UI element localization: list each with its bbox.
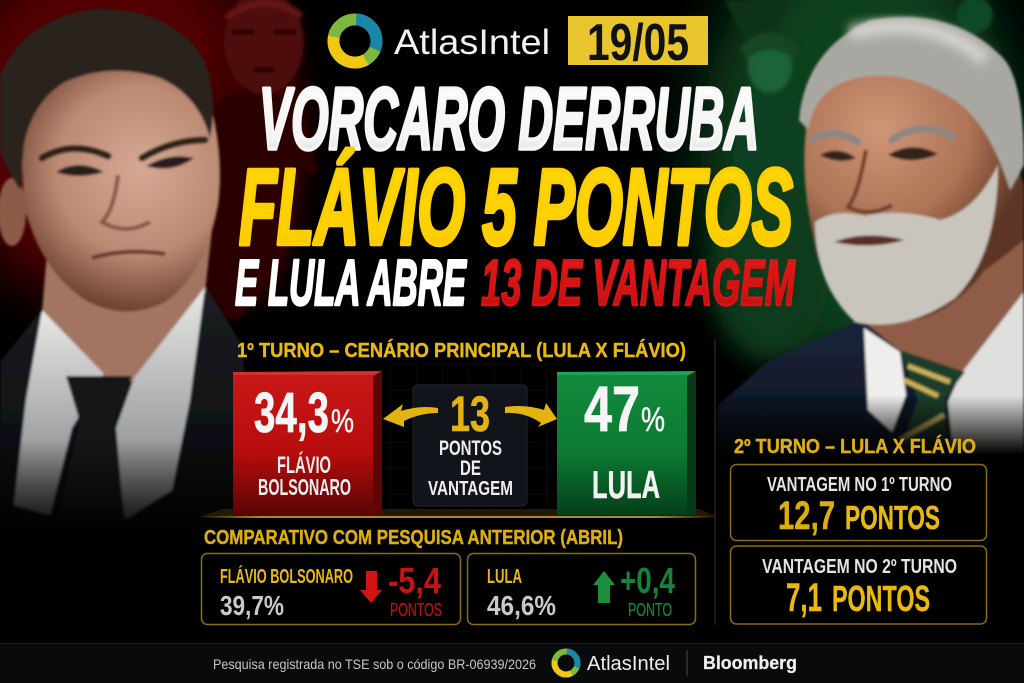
shirt right: [948, 292, 1024, 470]
eyebrows: [812, 129, 952, 142]
panel: second round advantage: [730, 546, 986, 624]
second round section heading: 2º TURNO – LULA X FLÁVIO: [734, 435, 976, 458]
shirt collar left: [864, 328, 906, 432]
panel: 13 points advantage: [413, 385, 527, 506]
suit jacket: [0, 285, 262, 560]
value: 34,3: [254, 381, 329, 445]
hair: [0, 9, 213, 190]
shelf line: [200, 509, 716, 518]
footer note: Pesquisa registrada no TSE sob o código BR-06939/2026: [213, 656, 536, 672]
neck: [42, 230, 212, 382]
suit jacket: [710, 300, 1024, 520]
header: AtlasIntel wordmark: AtlasIntel: [394, 23, 550, 62]
arrow: pointing to Flávio: [383, 404, 438, 427]
header: AtlasIntel logo: [326, 12, 384, 70]
panel: Flávio comparison: [202, 554, 460, 624]
label: VANTAGEM NO 1º TURNO: [767, 474, 952, 496]
name: LULA: [487, 566, 522, 588]
eyebrows: [42, 140, 205, 158]
unit: PONTO: [628, 600, 672, 620]
arrow: pointing to Lula: [505, 403, 557, 427]
name line 2: BOLSONARO: [258, 474, 351, 500]
mouth: [92, 252, 165, 258]
ghost portrait: red background figure: [205, 0, 318, 320]
unit: PONTOS: [390, 600, 442, 620]
label line 1: PONTOS: [439, 437, 502, 460]
footer logo: [550, 647, 582, 679]
tie: [56, 376, 132, 525]
beard: [815, 165, 998, 325]
value: 12,7: [778, 494, 835, 538]
previous value: 46,6%: [487, 590, 556, 621]
footer: [0, 643, 1024, 683]
value: 7,1: [786, 576, 822, 620]
header: date badge: 19/05: [587, 14, 689, 72]
nose: [848, 150, 892, 212]
grid backdrop: [380, 362, 560, 512]
panel: first round advantage: [730, 464, 986, 540]
comparison section heading: COMPARATIVO COM PESQUISA ANTERIOR (ABRIL): [204, 527, 623, 549]
label line 2: DE: [460, 457, 481, 480]
label: VANTAGEM NO 2º TURNO: [762, 556, 957, 578]
ghost figure: green statue: [724, 0, 993, 185]
change: +0,4: [620, 560, 675, 601]
portrait: Lula: [710, 17, 1024, 520]
value: %: [331, 403, 354, 439]
neck: [860, 200, 1024, 375]
hair: [799, 17, 1024, 190]
portrait: Flávio Bolsonaro: [0, 9, 262, 560]
first round section heading: 1º TURNO – CENÁRIO PRINCIPAL (LULA X FLÁVIO): [237, 339, 686, 362]
panel: Lula comparison: [468, 554, 696, 624]
change: -5,4: [388, 560, 441, 601]
panel: Lula 47%: [557, 371, 696, 515]
footer wordmark: AtlasIntel: [587, 653, 670, 675]
value: 47: [584, 373, 640, 445]
unit: PONTOS: [832, 578, 930, 619]
panel: Flávio 34,3%: [233, 371, 382, 515]
Bloomberg wordmark: Bloomberg: [703, 653, 797, 673]
title: [235, 69, 796, 319]
value: %: [641, 401, 665, 439]
eyes: [820, 147, 938, 161]
eyes: [56, 156, 194, 176]
icon: down arrow: [360, 571, 382, 603]
name line 1: FLÁVIO: [277, 451, 331, 479]
nose: [102, 175, 150, 229]
previous value: 39,7%: [220, 590, 284, 621]
unit: PONTOS: [845, 499, 940, 536]
title line 3 white: E LULA ABRE: [235, 246, 467, 319]
bottom fades over portraits: [0, 318, 1024, 683]
footer divider: [686, 650, 688, 676]
face: [804, 58, 1024, 321]
mouth: [834, 235, 905, 246]
label line 3: VANTAGEM: [428, 478, 513, 500]
value: 13: [450, 386, 490, 442]
name: FLÁVIO BOLSONARO: [220, 565, 353, 588]
shirt right of tie: [116, 287, 205, 520]
tie: [892, 350, 965, 470]
shirt left of tie: [14, 310, 104, 515]
icon: up arrow: [593, 571, 615, 603]
ear: [0, 178, 26, 246]
divider line: [714, 340, 716, 625]
face: [20, 55, 220, 312]
name: LULA: [592, 464, 660, 507]
